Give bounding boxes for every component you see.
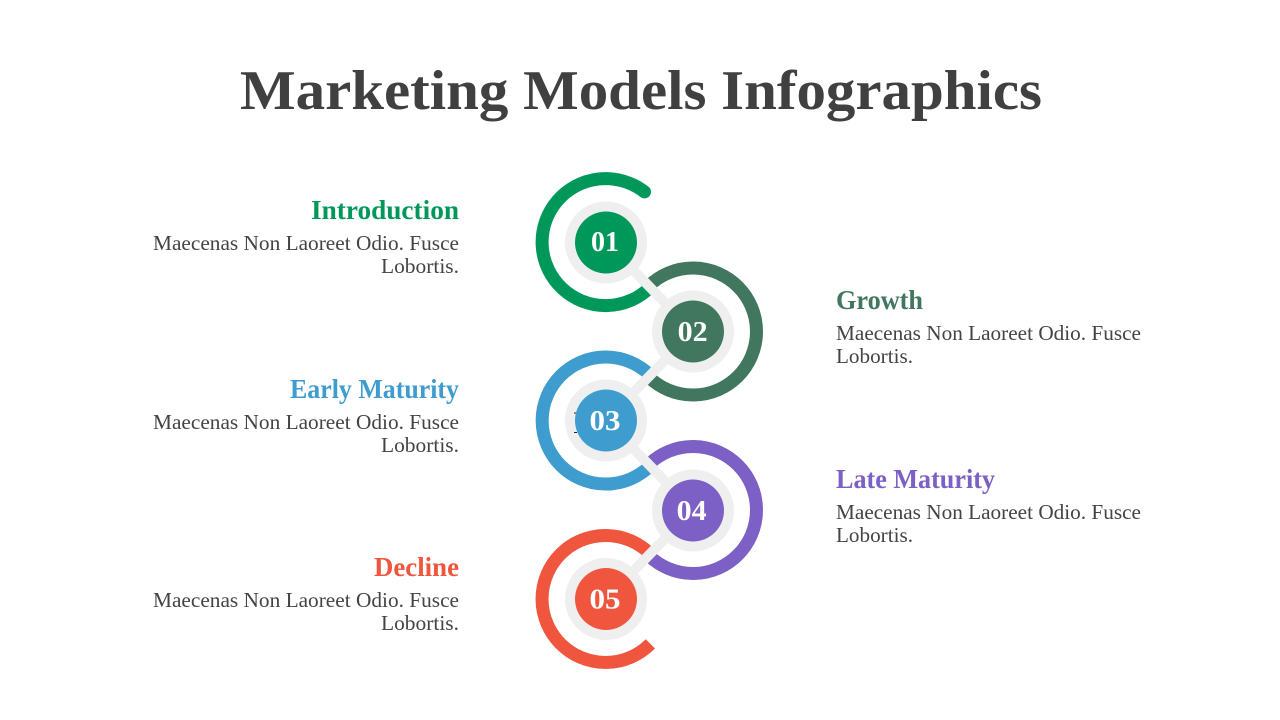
node: 03 bbox=[570, 384, 642, 456]
node: 01: 01 bbox=[591, 227, 619, 258]
connectors between numbered nodes bbox=[606, 242, 693, 599]
description: Late Maturity: Maecenas Non Laoreet Odio. Fusce bbox=[836, 500, 1141, 524]
description: Introduction: Maecenas Non Laoreet Odio. Fusce bbox=[153, 231, 459, 255]
description: Growth bbox=[836, 321, 1141, 368]
description: Early Maturity: Maecenas Non Laoreet Odio. Fusce bbox=[153, 410, 459, 434]
description: Early Maturity: Lobortis. bbox=[381, 433, 459, 457]
heading: Decline: Decline bbox=[374, 552, 459, 582]
text block: Late Maturity bbox=[836, 464, 1141, 547]
description: Late Maturity bbox=[836, 500, 1141, 547]
node: 03: 03 bbox=[590, 406, 620, 437]
ring: 02 bbox=[649, 268, 756, 395]
node: 05 bbox=[570, 563, 642, 635]
node: 04: 04 bbox=[677, 496, 707, 527]
description: Decline: Lobortis. bbox=[381, 611, 459, 635]
description: Growth: Maecenas Non Laoreet Odio. Fusce bbox=[836, 321, 1141, 345]
ring: 03 bbox=[542, 357, 650, 484]
heading: Late Maturity: Late Maturity bbox=[836, 464, 995, 494]
heading: Early Maturity: Early Maturity bbox=[290, 374, 459, 404]
node: 05: 05 bbox=[590, 584, 620, 616]
node: 02: 02 bbox=[678, 317, 708, 348]
description: Introduction: Lobortis. bbox=[381, 254, 459, 278]
ring: 04 bbox=[649, 446, 756, 573]
node: 01 bbox=[570, 206, 642, 278]
ring: 05 bbox=[542, 535, 650, 662]
description: Decline bbox=[153, 588, 459, 635]
node: 04 bbox=[657, 474, 729, 546]
title: Marketing Models Infographics bbox=[240, 60, 1042, 122]
text block: Decline bbox=[153, 552, 459, 635]
text block: Early Maturity bbox=[153, 374, 459, 457]
node: 02 bbox=[657, 296, 729, 368]
description: Early Maturity bbox=[153, 410, 459, 457]
description: Late Maturity: Lobortis. bbox=[836, 523, 913, 547]
description: Decline: Maecenas Non Laoreet Odio. Fusce bbox=[153, 588, 459, 612]
heading: Introduction: Introduction bbox=[311, 195, 459, 225]
description: Growth: Lobortis. bbox=[836, 344, 913, 368]
heading: Growth: Growth bbox=[836, 285, 923, 315]
text block: Growth bbox=[836, 285, 1141, 368]
ring: 01 bbox=[542, 179, 651, 306]
text block: Introduction bbox=[153, 195, 459, 278]
description: Introduction bbox=[153, 231, 459, 278]
